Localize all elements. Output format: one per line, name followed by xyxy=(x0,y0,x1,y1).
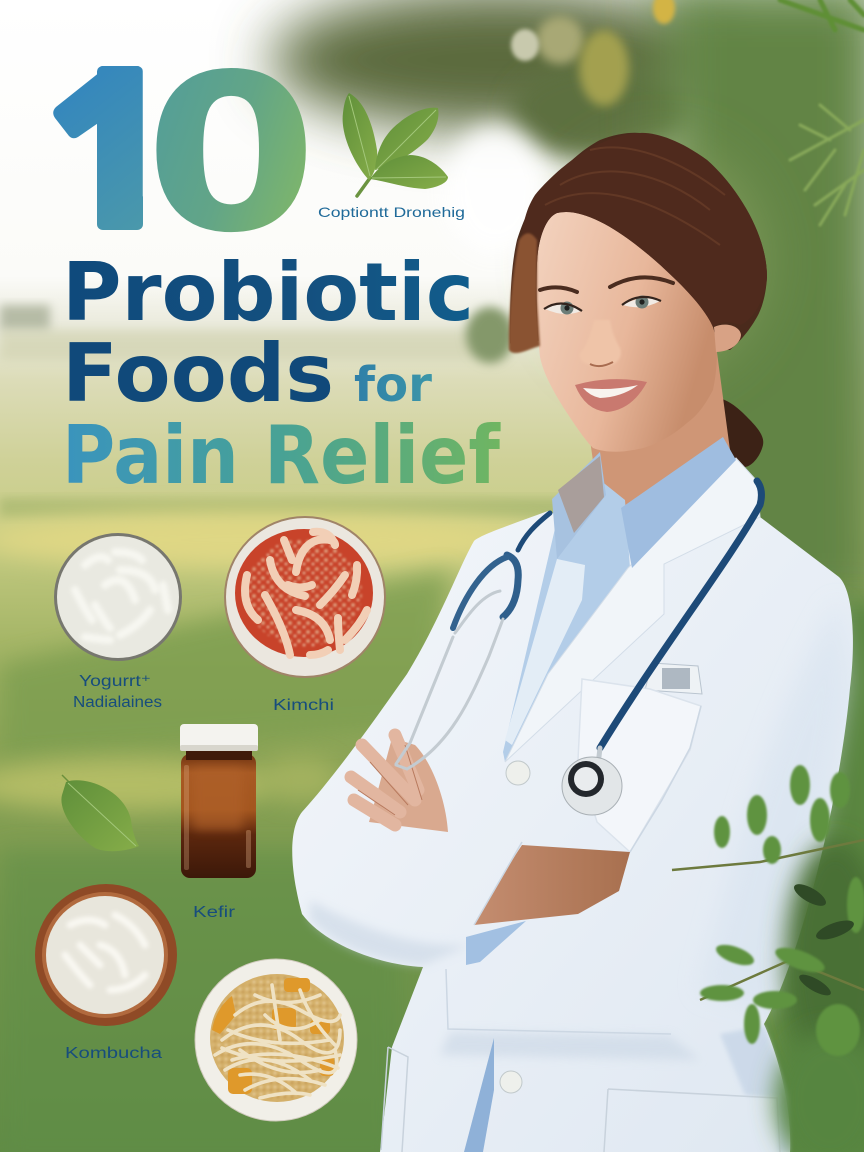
lower shirt strip xyxy=(464,1038,494,1152)
left shirt collar xyxy=(552,452,606,559)
food: kefir amber bottle xyxy=(180,724,258,878)
food: kimchi bowl xyxy=(224,516,386,678)
left hair strands xyxy=(509,233,540,353)
stethoscope xyxy=(396,481,761,769)
foliage: bottom right bush xyxy=(672,765,864,1152)
sleeve fold lines xyxy=(446,706,701,1034)
woman: doctor portrait xyxy=(292,133,853,1152)
bare forearm xyxy=(474,845,630,925)
eyes xyxy=(544,296,661,314)
coat shading xyxy=(742,606,864,1020)
label: yogurt xyxy=(73,673,162,711)
heading: for: for xyxy=(354,357,432,413)
label: yogurt: Yogurrt⁺ xyxy=(79,673,151,690)
icon: small leaf xyxy=(61,775,139,851)
face xyxy=(537,212,717,452)
icon: green leaf sprig xyxy=(343,93,448,196)
title: 10 xyxy=(53,66,306,232)
foliage: top right branches xyxy=(780,0,864,225)
heading: Probiotic: Probiotic xyxy=(62,246,474,339)
label: kefir: Kefir xyxy=(193,904,235,921)
label: kombucha: Kombucha xyxy=(65,1045,162,1062)
heading: Foods: Foods xyxy=(62,327,334,420)
hand with fingers xyxy=(351,735,448,832)
lower pockets xyxy=(381,1047,780,1152)
front hair sweep xyxy=(521,133,767,327)
food: noodle bowl xyxy=(195,959,357,1121)
label: kimchi: Kimchi xyxy=(273,697,334,714)
caption under leaf: Coptiontt Dronehig xyxy=(318,204,465,220)
low ponytail xyxy=(713,397,763,467)
stethoscope chest piece xyxy=(562,757,622,815)
coat button upper xyxy=(506,761,530,785)
eyebrows xyxy=(540,277,673,292)
pocket with cards xyxy=(578,663,702,852)
shirt xyxy=(503,480,630,762)
heading: Pain Relief: Pain Relief xyxy=(62,409,501,502)
nose xyxy=(580,320,621,367)
title: 10: 0 xyxy=(144,28,318,281)
food: kombucha wooden bowl xyxy=(35,884,177,1026)
title: 10: 1 xyxy=(36,21,192,282)
coat upper collar and lapel xyxy=(505,458,760,762)
sleeve and hem shadows xyxy=(310,900,700,1060)
coat silhouette xyxy=(292,458,853,1152)
right shirt collar xyxy=(621,437,736,568)
shirt cuff xyxy=(466,921,526,965)
neck xyxy=(590,345,730,520)
label: yogurt: Nadialaines xyxy=(73,694,162,711)
ear xyxy=(714,325,741,352)
smile xyxy=(575,379,647,412)
food: yogurt dish xyxy=(54,533,182,661)
hair back xyxy=(510,133,767,350)
coat button lower xyxy=(500,1071,522,1093)
